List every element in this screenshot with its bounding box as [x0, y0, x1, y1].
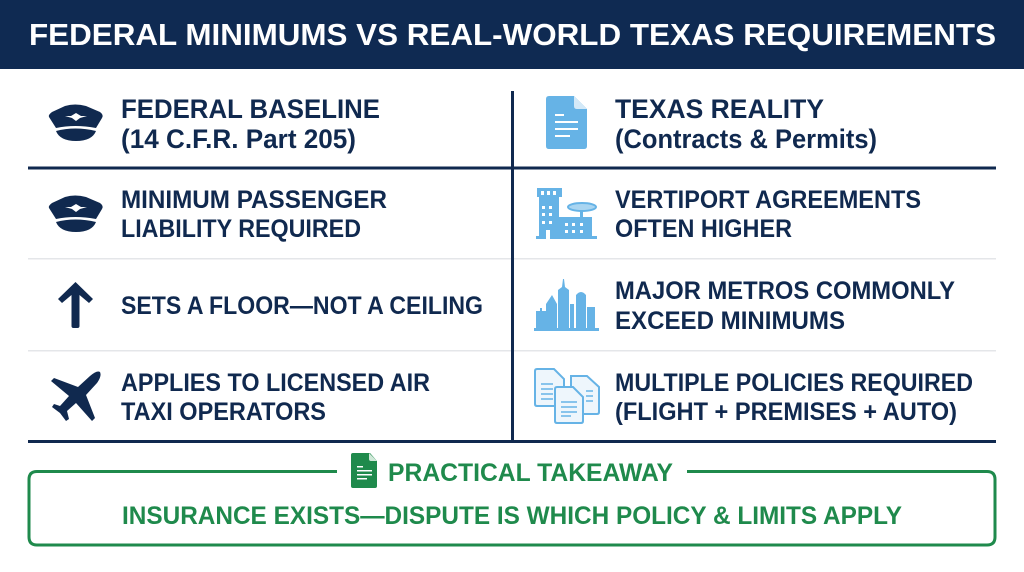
text: major metros: EXCEED MINIMUMS — [615, 307, 845, 335]
heading: texas reality: (Contracts & Permits) — [615, 124, 877, 154]
heading: federal baseline — [121, 94, 380, 154]
title banner: FEDERAL MINIMUMS VS REAL-WORLD TEXAS REQUIREMENTS — [29, 17, 996, 52]
text: takeaway statement: INSURANCE EXISTS—DISPUTE IS WHICH POLICY & LIMITS APPLY — [122, 502, 902, 530]
icon: pilot cap header — [49, 104, 103, 141]
text: minimum passenger liability: MINIMUM PASSENGER — [121, 186, 387, 214]
icon: blue document — [546, 96, 587, 149]
text: major metros — [615, 277, 955, 335]
icon: up arrow — [58, 282, 93, 328]
heading: federal baseline: FEDERAL BASELINE — [121, 94, 380, 124]
text: applies to licensed operators: APPLIES TO LICENSED AIR — [121, 369, 430, 397]
heading: texas reality — [615, 94, 877, 154]
text: applies to licensed operators — [121, 369, 430, 426]
icon: pilot cap row — [49, 196, 103, 232]
icon: stacked documents — [535, 369, 599, 423]
icon: green document — [351, 453, 377, 488]
icon: vertiport building — [536, 188, 597, 239]
text: multiple policies: MULTIPLE POLICIES REQUIRED — [615, 369, 973, 397]
text: multiple policies: (FLIGHT + PREMISES + AUTO) — [615, 398, 957, 426]
text: vertiport agreements — [615, 186, 921, 243]
text: applies to licensed operators: TAXI OPERATORS — [121, 398, 326, 426]
icon: city skyline — [534, 279, 599, 331]
heading: federal baseline: (14 C.F.R. Part 205) — [121, 124, 356, 154]
icon: airplane — [51, 372, 101, 421]
heading: texas reality: TEXAS REALITY — [615, 94, 824, 124]
panel: texas reality — [534, 94, 973, 426]
text: sets a floor: SETS A FLOOR—NOT A CEILING — [121, 292, 483, 320]
text: vertiport agreements: VERTIPORT AGREEMENTS — [615, 186, 921, 214]
text: minimum passenger liability — [121, 186, 387, 243]
text: vertiport agreements: OFTEN HIGHER — [615, 215, 792, 243]
heading: practical takeaway: PRACTICAL TAKEAWAY — [388, 459, 673, 487]
title banner — [0, 0, 1024, 69]
text: major metros: MAJOR METROS COMMONLY — [615, 277, 955, 305]
panel: federal baseline — [49, 94, 483, 426]
text: multiple policies — [615, 369, 973, 426]
panel: practical takeaway — [29, 453, 995, 545]
text: minimum passenger liability: LIABILITY REQUIRED — [121, 215, 361, 243]
